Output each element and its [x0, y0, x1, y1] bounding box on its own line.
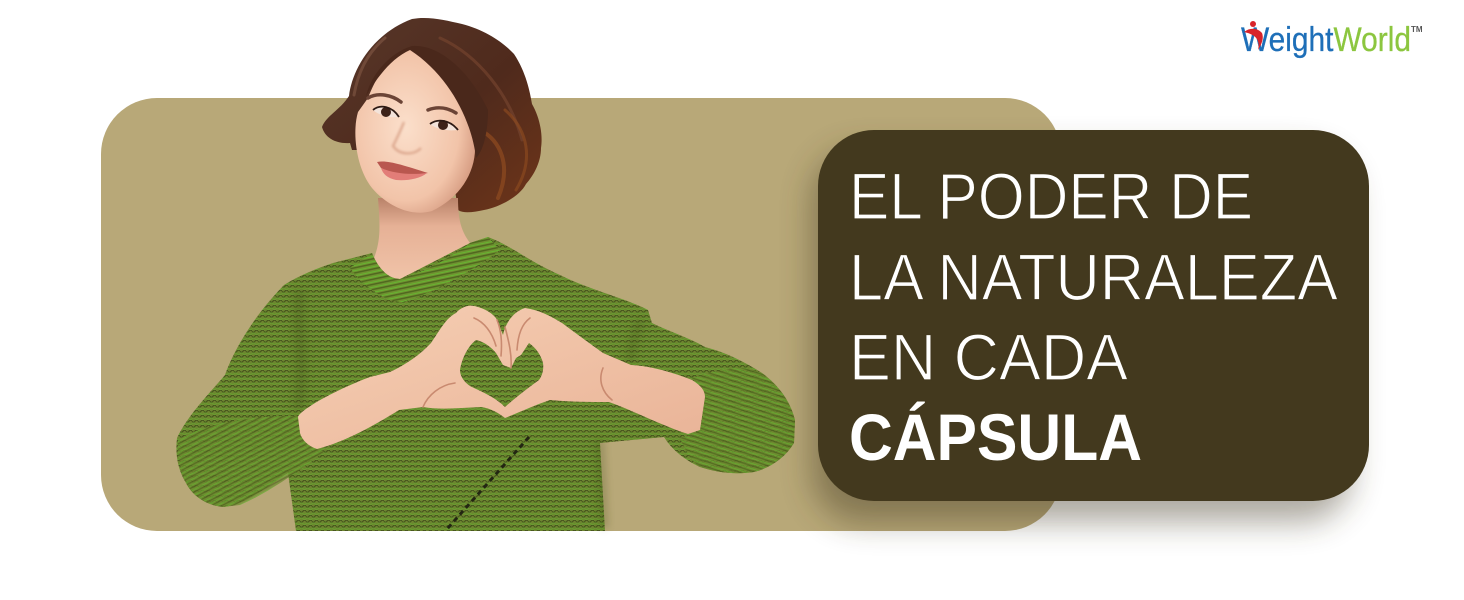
logo figure [1244, 21, 1263, 50]
left eyebrow [368, 95, 401, 102]
title line 2: LA NATURALEZA [849, 240, 1338, 314]
right cuff [680, 368, 795, 473]
hair fringe [366, 46, 488, 158]
sweater collar [350, 237, 500, 302]
nose [393, 122, 421, 153]
panel: tan background [101, 98, 1061, 531]
title [849, 159, 1338, 474]
left eye [373, 107, 399, 117]
lips [377, 162, 428, 180]
left cuff [178, 416, 325, 507]
title line 1: EL PODER DE [849, 159, 1253, 233]
illustration: woman making a heart with her hands [176, 18, 795, 531]
finger details [423, 318, 612, 407]
hair highlights [354, 38, 527, 198]
title line 3: EN CADA [849, 320, 1128, 394]
logo wordmark: WeightWorld [1241, 21, 1411, 59]
neck [374, 198, 470, 279]
right eyebrow [428, 108, 456, 113]
logo: WeightWorld [1241, 21, 1423, 59]
sweater diagonal openwork [447, 437, 529, 529]
face [355, 48, 475, 213]
arms and heart-shaped hands [298, 306, 705, 449]
sweater body and sleeves [176, 237, 795, 531]
hair back [322, 18, 542, 212]
right eye [430, 120, 458, 130]
title line 4: CÁPSULA [849, 400, 1142, 474]
shadow of dark panel [812, 150, 1352, 522]
sweater fold shading [298, 290, 640, 528]
logo trademark: TM [1411, 25, 1423, 34]
panel: dark title card [818, 130, 1369, 501]
